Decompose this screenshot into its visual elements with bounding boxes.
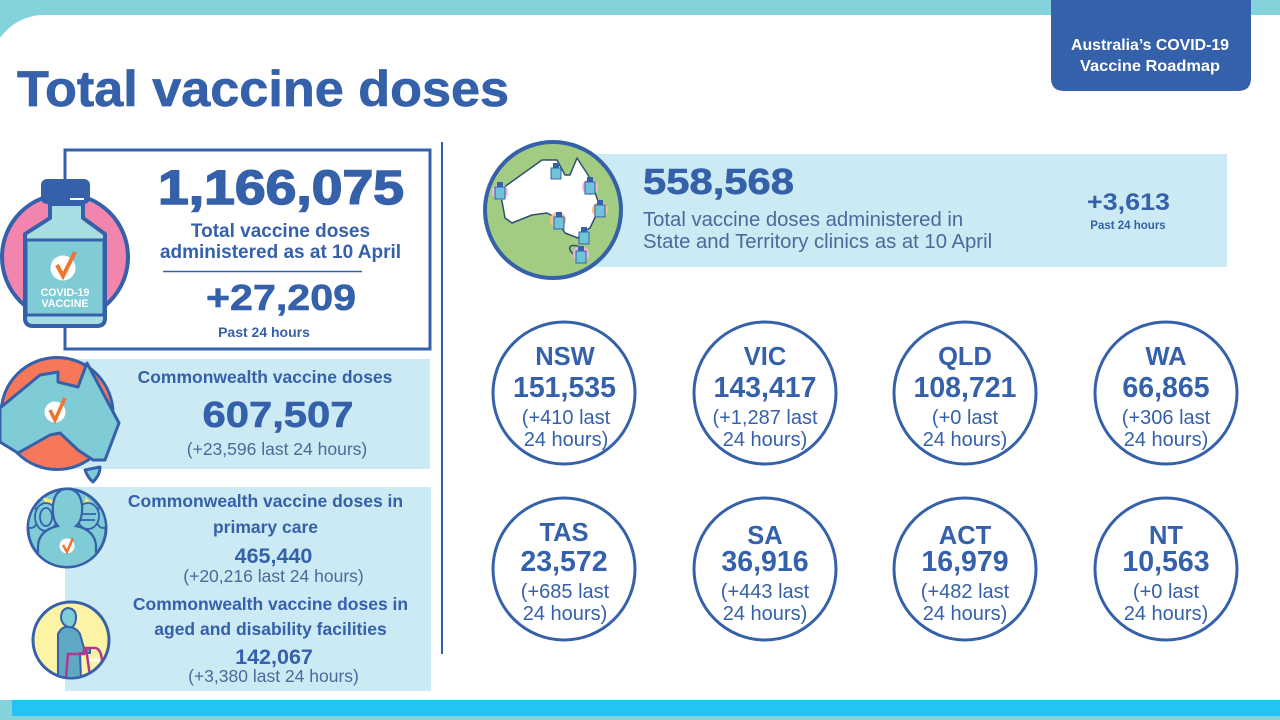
clinics increase: +3,613	[1087, 189, 1170, 216]
aged care number: 142,067	[235, 645, 313, 669]
total doses caption: administered as at 10 April	[160, 242, 401, 263]
stat: NT: NT	[1149, 522, 1183, 550]
stat: TAS: TAS	[539, 519, 589, 547]
clinics caption: State and Territory clinics as at 10 April	[643, 231, 992, 253]
primary care heading: primary care	[213, 517, 318, 537]
icon: Australia map with tick	[0, 358, 119, 482]
roadmap badge: Australia’s COVID-19	[1071, 37, 1229, 54]
roadmap badge	[1051, 0, 1251, 91]
stat: NT: 24 hours)	[1124, 603, 1208, 625]
daily increase: +27,209	[206, 277, 356, 318]
stat: VIC: (+1,287 last	[712, 407, 818, 429]
stat: SA: 24 hours)	[723, 603, 807, 625]
stat: WA: 66,865	[1122, 372, 1210, 404]
stat: NT: 10,563	[1122, 546, 1210, 578]
commonwealth number: 607,507	[202, 394, 354, 435]
roadmap badge: Vaccine Roadmap	[1080, 58, 1220, 75]
primary care heading: Commonwealth vaccine doses in	[128, 491, 403, 511]
stat: SA: 36,916	[721, 546, 809, 578]
stat: ACT	[894, 498, 1036, 640]
stat: TAS: (+685 last	[521, 581, 610, 603]
stat: ACT: 16,979	[921, 546, 1009, 578]
total doses number: 1,166,075	[158, 162, 404, 215]
stat: QLD	[894, 322, 1036, 464]
panel: commonwealth doses	[70, 359, 430, 469]
stat: VIC: 24 hours)	[723, 429, 807, 451]
stat: QLD: QLD	[938, 343, 992, 371]
panel: state and territory clinics	[590, 154, 1227, 267]
stat: WA	[1095, 322, 1237, 464]
stat: SA: SA	[747, 522, 783, 550]
icon: vaccine vial: VACCINE	[42, 298, 88, 310]
stat: NSW: (+410 last	[522, 407, 611, 429]
stat: VIC: 143,417	[713, 372, 817, 404]
clinics caption	[643, 209, 992, 253]
stat: WA: (+306 last	[1122, 407, 1211, 429]
stat: NSW: 151,535	[513, 372, 616, 404]
total doses caption: Total vaccine doses	[191, 221, 370, 242]
icon: vaccine vial	[2, 179, 128, 326]
commonwealth heading: Commonwealth vaccine doses	[138, 367, 393, 387]
aged care heading: aged and disability facilities	[154, 619, 387, 639]
panel: primary care and aged care	[65, 487, 431, 691]
clinics number: 558,568	[643, 161, 794, 202]
icon: elderly person with walker	[33, 602, 109, 680]
stat: WA: WA	[1145, 343, 1187, 371]
stat: QLD: (+0 last	[932, 407, 999, 429]
divider	[441, 142, 443, 654]
stat: NT: (+0 last	[1133, 581, 1200, 603]
stat: VIC	[694, 322, 836, 464]
stat: ACT: (+482 last	[921, 581, 1010, 603]
past 24 hours: Past 24 hours	[218, 324, 310, 340]
icon: vaccine vial: COVID-19	[41, 287, 90, 299]
stat: TAS: 23,572	[520, 546, 608, 578]
clinics caption: Total vaccine doses administered in	[643, 209, 963, 231]
stat: ACT: ACT	[939, 522, 992, 550]
stat: VIC: VIC	[744, 343, 786, 371]
top banner	[0, 0, 1280, 38]
aged care increase: (+3,380 last 24 hours)	[188, 666, 359, 686]
panel: total doses	[65, 150, 430, 349]
stat: TAS: 24 hours)	[523, 603, 607, 625]
icon: Australia map with vials	[485, 142, 621, 278]
stat: TAS	[493, 498, 635, 640]
icon: primary care people	[24, 489, 110, 570]
stat: SA	[694, 498, 836, 640]
stat: ACT: 24 hours)	[923, 603, 1007, 625]
commonwealth increase: (+23,596 last 24 hours)	[187, 439, 367, 459]
aged care heading: Commonwealth vaccine doses in	[133, 594, 408, 614]
stat: QLD: 24 hours)	[923, 429, 1007, 451]
stat: NT	[1095, 498, 1237, 640]
stat: SA: (+443 last	[721, 581, 810, 603]
stat: QLD: 108,721	[913, 372, 1017, 404]
stat: NSW: NSW	[535, 343, 596, 371]
vial markers	[492, 163, 608, 263]
stat: NSW	[493, 322, 635, 464]
primary care number: 465,440	[235, 544, 312, 568]
bottom banner	[0, 700, 1280, 720]
total doses caption	[160, 221, 401, 263]
stat: WA: 24 hours)	[1124, 429, 1208, 451]
stat: NSW: 24 hours)	[524, 429, 608, 451]
aged care heading	[133, 594, 408, 639]
title: Total vaccine doses	[17, 60, 509, 117]
primary care increase: (+20,216 last 24 hours)	[183, 566, 364, 586]
clinics past 24 hours: Past 24 hours	[1090, 220, 1166, 232]
primary care heading	[128, 491, 403, 537]
